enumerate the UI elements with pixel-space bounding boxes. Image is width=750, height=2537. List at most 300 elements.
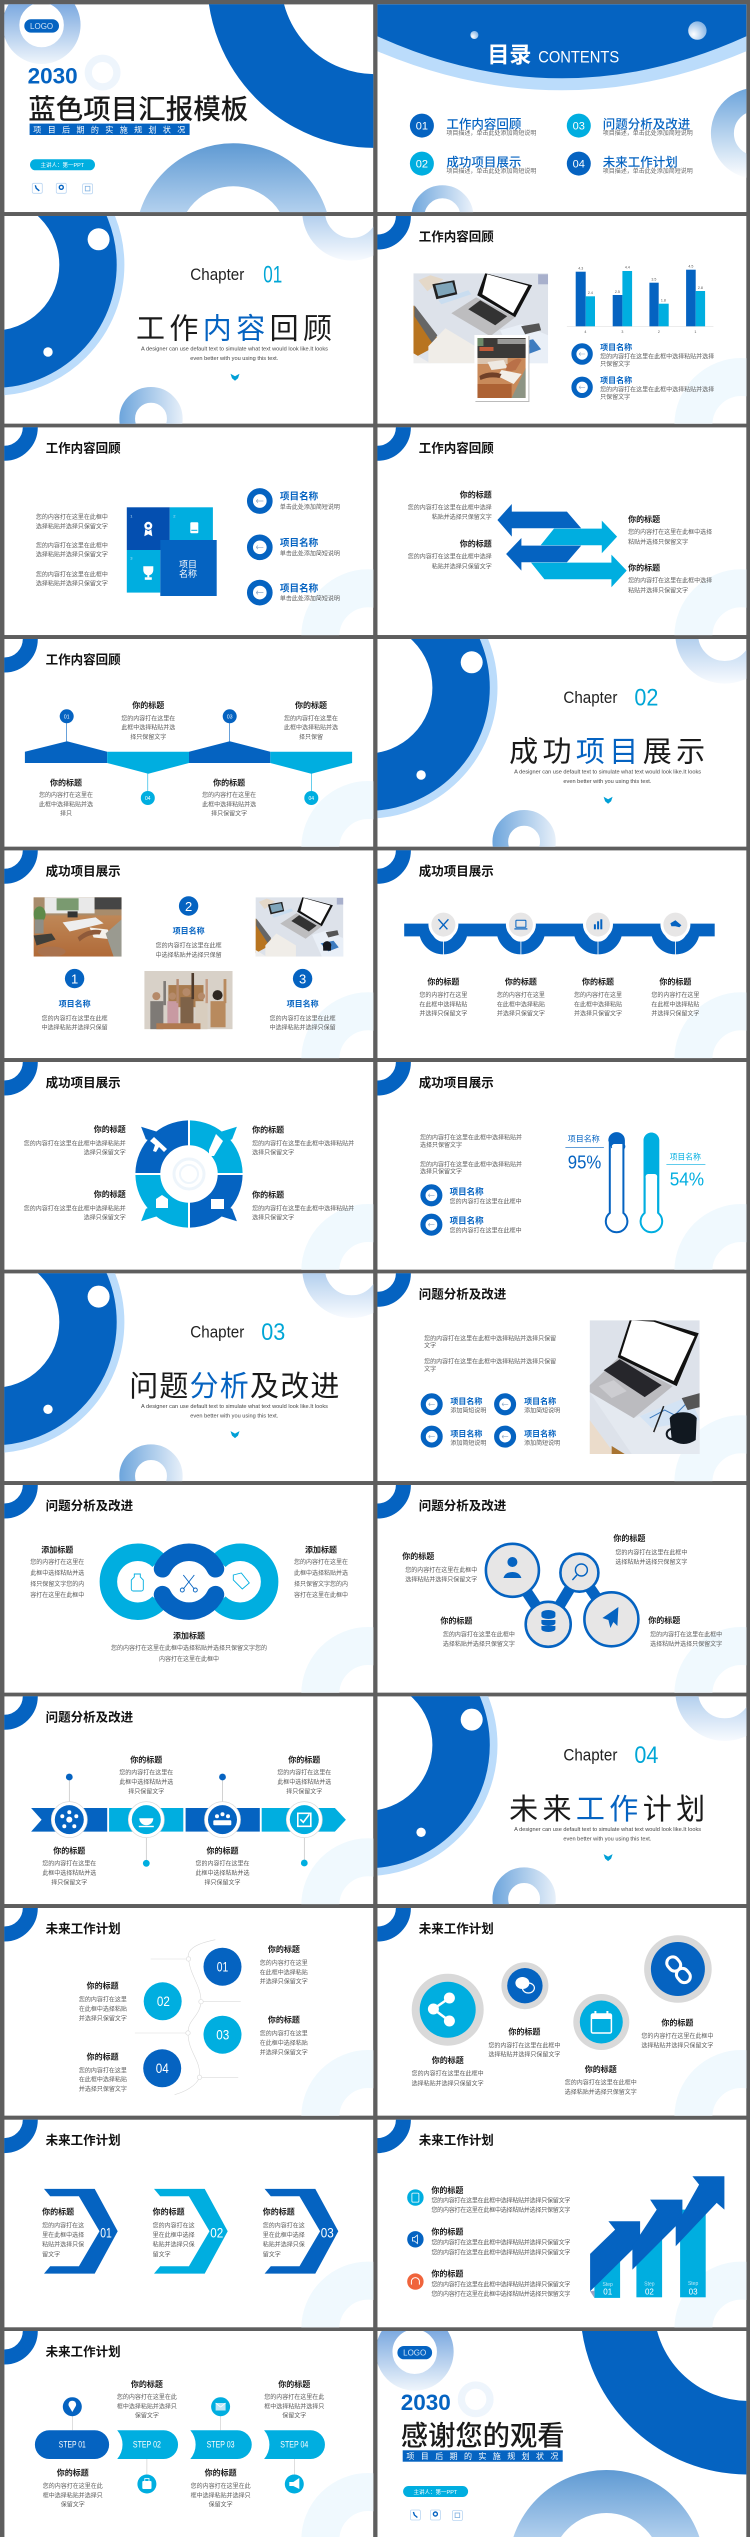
- chevron 03: [265, 2189, 338, 2274]
- numbered circles: [143, 1948, 242, 2087]
- heading: 成功项目展示: [46, 863, 121, 878]
- slide background: [4, 427, 374, 636]
- text: bottom left: 您的内容打在这里在此框中选择粘贴并: [24, 1204, 126, 1212]
- item: project one: [574, 342, 714, 368]
- text: bottom left: 此框中选择粘贴并选: [42, 1869, 96, 1877]
- step labels: Step: [644, 2282, 655, 2288]
- panel: future plan growth arrows: [351, 2094, 750, 2377]
- numbered circles: 02: [157, 1993, 170, 2009]
- slide background: [0, 1036, 416, 1319]
- chapter caption: [141, 1404, 328, 1419]
- text: top two: 框中选择粘贴并选择只: [264, 2402, 324, 2410]
- column 3 text: 在此框中选择粘贴: [574, 1000, 622, 1008]
- contents item 03: 03: [573, 121, 585, 133]
- text: 01: 你的标题: [42, 2207, 74, 2217]
- column 3 text: 您的内容打在这里: [574, 991, 622, 999]
- item: three: 你的标题: [431, 2269, 463, 2279]
- paragraphs: 您的内容打在这里在此框中选择粘贴并: [420, 1134, 522, 1142]
- column 3 text: [574, 976, 622, 1018]
- text: right: 添加标题: [305, 1545, 337, 1555]
- chapter caption: A designer can use default text to simulate what text would look like.It looks: [141, 1404, 328, 1410]
- item three: [423, 1428, 486, 1447]
- step 04: [264, 2430, 325, 2459]
- text: right two: 你的标题: [628, 563, 660, 573]
- text: top right: 选择粘贴并选择只保留文字: [615, 1558, 687, 1566]
- text: bottom left: 你的标题: [50, 777, 82, 787]
- chapter background shapes: [240, 561, 750, 866]
- icon: calendar circle: [573, 1994, 629, 2050]
- text: 04: 您的内容打在这里: [79, 2066, 127, 2074]
- text: bottom left: 您的内容打在这里在: [42, 1860, 96, 1868]
- text: bottom centre: 此框中选择粘贴并选: [195, 1869, 250, 1877]
- text: 02: 粘贴并选择只保: [153, 2241, 195, 2249]
- contents item 03: 问题分析及改进: [603, 116, 691, 131]
- panel: success projects thermometers: [351, 1036, 750, 1319]
- panel: success projects wheel: [0, 1036, 416, 1319]
- text: bottom two: [191, 2468, 251, 2509]
- icon: share circle: [412, 1974, 484, 2046]
- item 2: [156, 896, 222, 959]
- chapter caption: A designer can use default text to simulate what text would look like.It looks: [514, 770, 701, 776]
- text: bottom two: 你的标题: [205, 2468, 237, 2478]
- thermometer 95: 95%: [568, 1153, 601, 1173]
- text: top one: 保留文字: [135, 2412, 159, 2420]
- chapter title: 成功项目展示: [509, 736, 710, 768]
- presenter pill: 主讲人：第一PPT: [40, 161, 85, 169]
- chapter label: [563, 1742, 658, 1769]
- contents item 02: 成功项目展示: [446, 154, 521, 169]
- chapter label: 04: [634, 1742, 658, 1769]
- item: project two: 项目名称: [450, 1216, 484, 1226]
- numbered circles: 04: [156, 2060, 169, 2076]
- column 1 text: 你的标题: [427, 976, 459, 986]
- pins: [60, 709, 318, 805]
- item: one: 你的标题: [431, 2185, 463, 2195]
- connected bubbles: [486, 1544, 638, 1647]
- text: bottom left: [440, 1615, 515, 1648]
- text: 03: [260, 2015, 308, 2056]
- text: left two: 粘贴并选择只保留文字: [432, 562, 492, 570]
- panel: success projects wave: [351, 824, 750, 1107]
- step labels: Step: [603, 2282, 613, 2288]
- heading: 问题分析及改进: [419, 1286, 507, 1301]
- item: project two: 您的内容打在这里在此框中: [450, 1227, 522, 1235]
- text: top right: 你的标题: [252, 1125, 284, 1135]
- chevron 02: 02: [210, 2225, 223, 2241]
- item: project three: 单击此处添加简短说明: [280, 595, 340, 603]
- bar chart: 4.4: [625, 266, 630, 270]
- text: bottom right: 您的内容打在这里在此框中选择粘贴并: [252, 1204, 354, 1212]
- item 1: 中选择粘贴并选择只保留: [42, 1024, 108, 1032]
- text: bottom one: 保留文字: [61, 2501, 85, 2509]
- heading: 成功项目展示: [419, 1075, 494, 1090]
- photo: laptop: [256, 897, 343, 957]
- heading: 工作内容回顾: [419, 229, 494, 244]
- panel: problem analysis ribbon: [0, 1670, 416, 1953]
- column 1 text: 并选择只保留文字: [419, 1010, 467, 1018]
- bar chart: 4.3: [578, 266, 583, 270]
- text: bottom centre: 你的标题: [206, 1845, 238, 1855]
- text: top left: 您的内容打在这里在此框中: [405, 1566, 477, 1574]
- text: top right: 你的标题: [295, 700, 327, 710]
- chapter label: [563, 685, 658, 712]
- text: 01: 您的内容打在这: [42, 2221, 84, 2229]
- chapter title: 未来工作计划: [509, 1793, 710, 1826]
- slide background: [351, 1036, 750, 1319]
- icon: chevron: [230, 1431, 240, 1438]
- icon: chevron: [604, 797, 613, 804]
- text: share: 你的标题: [432, 2055, 464, 2065]
- text: 03: 你的标题: [268, 2015, 300, 2025]
- text: bottom right: 你的标题: [252, 1190, 284, 1200]
- text: 01: 在此框中选择粘贴: [260, 1968, 308, 1976]
- text: top left: [402, 1551, 477, 1583]
- text: top right: 择只保留: [299, 733, 323, 741]
- text: left: 您的内容打在这里在: [30, 1558, 84, 1566]
- text: top right: 你的标题: [613, 1533, 645, 1543]
- contents item 02: 02: [416, 159, 428, 171]
- text: 03: 您的内容打在这里: [260, 2030, 308, 2038]
- icon: chevron: [230, 374, 240, 381]
- text: 03: 留文字: [263, 2250, 281, 2258]
- item: one: 您的内容打在这里在此框中选择粘贴并选择只保留文字: [431, 2206, 570, 2214]
- contents item 04: 项目描述，单击此处添加简短说明: [603, 167, 693, 175]
- zigzag band: [25, 741, 352, 774]
- text: top two: 您的内容打在这里在此: [264, 2393, 324, 2401]
- step 01: STEP 01: [59, 2440, 86, 2450]
- text: right one: 粘贴并选择只保留文字: [628, 538, 688, 546]
- paragraphs: 您的内容打在这里在此框中选择粘贴并选择只保留: [424, 1358, 556, 1366]
- text: bottom two: 您的内容打在这里在此: [191, 2482, 251, 2490]
- text: bottom: [111, 1630, 267, 1663]
- heading: 问题分析及改进: [46, 1498, 134, 1513]
- text: bottom centre: 择只保留文字: [211, 810, 247, 818]
- text: bottom left: [39, 777, 93, 818]
- text: 01: 您的内容打在这里: [260, 1959, 308, 1967]
- subtitle bar: 项目后期的实施规划状况: [406, 2451, 558, 2461]
- text: calendar: 您的内容打在这里在此框中: [565, 2079, 637, 2087]
- item: two: [407, 2227, 570, 2256]
- text: top right: 你的标题: [288, 1755, 320, 1765]
- text: left two: 你的标题: [460, 538, 492, 548]
- slide background: [0, 2094, 416, 2377]
- heading: 未来工作计划: [46, 2344, 121, 2359]
- thermometer 95: 项目名称: [568, 1133, 600, 1143]
- column 4 text: 你的标题: [659, 976, 691, 986]
- text: top right: [277, 1755, 331, 1795]
- text: right two: 粘贴并选择只保留文字: [628, 586, 688, 594]
- inset photo: [474, 335, 529, 402]
- item 1: 项目名称: [59, 999, 91, 1009]
- text: bottom left: 你的标题: [440, 1615, 472, 1625]
- chapter label: [190, 1319, 285, 1346]
- text: top right: 选择只保留文字: [252, 1149, 294, 1157]
- text: bottom left: 择只: [60, 810, 72, 818]
- paragraphs: 文字: [424, 1342, 436, 1350]
- column 3 text: 你的标题: [582, 976, 614, 986]
- text: left one: 你的标题: [460, 489, 492, 499]
- text: link: 你的标题: [661, 2017, 693, 2027]
- chapter caption: [141, 347, 328, 362]
- icon: megaphone: [285, 2474, 304, 2494]
- item: two: 您的内容打在这里在此框中选择粘贴并选择只保留文字: [431, 2239, 570, 2247]
- presenter pill: [30, 159, 95, 170]
- slide background: [0, 1670, 416, 1953]
- text: top right: 您的内容打在这里在此框中选择粘贴并: [252, 1139, 354, 1147]
- contents top banner: [377, 4, 746, 90]
- text: 03: [263, 2207, 305, 2258]
- photo: laptop close-up: [590, 1320, 700, 1454]
- text: top two: 保留文字: [282, 2412, 306, 2420]
- text: calendar: 选择粘贴并选择只保留文字: [565, 2088, 637, 2096]
- contents heading: [490, 44, 618, 65]
- text: bottom: 添加标题: [173, 1630, 205, 1640]
- presenter pill: [403, 2486, 468, 2497]
- text: 03: 里在此框中选择: [263, 2231, 305, 2239]
- pins: 03: [227, 714, 233, 720]
- contents item 02: [410, 152, 536, 176]
- text: right: 您的内容打在这里在: [294, 1558, 348, 1566]
- paragraphs: 您的内容打在这里在此框中选择粘贴并: [420, 1160, 522, 1168]
- chapter title: 工作内容回顾: [136, 312, 336, 346]
- logo badge: LOGO: [30, 22, 53, 31]
- column 4 text: 您的内容打在这里: [651, 991, 699, 999]
- text: 04: 并选择只保留文字: [79, 2085, 127, 2093]
- step 02: [117, 2430, 178, 2459]
- wave band: [404, 930, 715, 948]
- item three: 添加简短说明: [450, 1439, 486, 1447]
- text: top centre: 择只保留文字: [130, 733, 166, 741]
- text: top left: 选择粘贴并选择只保留文字: [405, 1575, 477, 1583]
- text: top right: 您的内容打在这里在: [284, 714, 338, 722]
- item: project two: 单击此处添加简短说明: [280, 550, 340, 558]
- text: 01: 粘贴并选择只保: [42, 2241, 84, 2249]
- slide background: [0, 824, 416, 1107]
- year: 2030: [401, 2390, 451, 2415]
- text: bottom left: 择只保留文字: [51, 1878, 87, 1886]
- text: bottom right: [648, 1615, 722, 1648]
- item: three: 您的内容打在这里在此框中选择粘贴并选择只保留文字: [431, 2290, 570, 2298]
- tile grid: 名称: [179, 568, 197, 579]
- heading: 工作内容回顾: [46, 440, 121, 455]
- text: top one: [117, 2379, 177, 2420]
- text: right: 容打在这里在此框中: [294, 1591, 348, 1599]
- text: bottom left: [42, 1845, 96, 1886]
- chapter label: Chapter: [563, 1745, 618, 1764]
- item: project one: 项目名称: [450, 1187, 484, 1197]
- bar chart: 2.5: [615, 290, 620, 294]
- contents item 04: 未来工作计划: [603, 154, 678, 169]
- text: bottom left: 你的标题: [94, 1189, 126, 1199]
- text: bottom left: [24, 1189, 126, 1222]
- text: top right: 此框中选择粘贴并选: [284, 724, 338, 732]
- text: right: 择只保留文字您的内: [294, 1580, 348, 1588]
- text: top centre: 此框中选择粘贴并选: [121, 724, 175, 732]
- text: 02: 您的内容打在这里: [79, 1996, 127, 2004]
- connectors: [72, 2416, 294, 2475]
- text: top left: 您的内容打在这里在此框中选择粘贴并: [24, 1139, 126, 1147]
- panel: chapter 01: [4, 216, 374, 424]
- pins: 04: [145, 796, 151, 802]
- slide background: [0, 1882, 416, 2165]
- tile grid: 1: [130, 513, 133, 518]
- text: right: [294, 1545, 348, 1599]
- text: chat: 选择粘贴并选择只保留文字: [488, 2051, 560, 2059]
- panel: future plan icon circles: [351, 1882, 750, 2165]
- text: left one: 粘贴并选择只保留文字: [432, 513, 492, 521]
- item: project two: [250, 537, 340, 558]
- text: 01: 留文字: [42, 2250, 60, 2258]
- text: bottom left: 您的内容打在这里在: [39, 791, 93, 799]
- chapter background shapes: [240, 1618, 750, 1923]
- item: project one: 项目名称: [280, 490, 319, 502]
- text: bottom left: 此框中选择粘贴并选: [39, 800, 93, 808]
- icon: bag: [137, 2474, 156, 2494]
- text: bottom centre: 您的内容打在这里在: [195, 1860, 250, 1868]
- chapter caption: [514, 1827, 701, 1842]
- panel: work review timeline: [0, 613, 416, 896]
- bar chart: 4.5: [688, 264, 693, 268]
- text: 02: 里在此框中选择: [153, 2231, 195, 2239]
- tile grid: 3: [130, 555, 133, 560]
- item 2: 项目名称: [173, 925, 205, 935]
- text: top right: [252, 1125, 354, 1157]
- connector line: [135, 1940, 241, 2095]
- item: project two: 只保留文字: [600, 393, 630, 401]
- text: bottom two: 保留文字: [209, 2501, 233, 2509]
- step 03: STEP 03: [207, 2440, 235, 2450]
- contents heading: 目录: [487, 42, 531, 67]
- bar chart: 2.8: [698, 286, 703, 290]
- text: left: 此框中选择粘贴并选: [30, 1569, 84, 1577]
- text: top right: 择只保留文字: [286, 1787, 322, 1795]
- numbered circles: 03: [216, 2026, 229, 2042]
- logo badge: [397, 2346, 432, 2359]
- panel: future plan steps: [0, 2305, 416, 2537]
- item four: 添加简短说明: [524, 1439, 560, 1447]
- text: bottom one: [43, 2468, 103, 2509]
- panel: chapter 03: [0, 1195, 390, 1500]
- item: project two: 您的内容打在这里在此框中选择粘贴并选择: [600, 386, 714, 394]
- item: project three: 项目名称: [280, 582, 319, 594]
- icon: chat circle: [501, 1962, 548, 2009]
- chapter caption: even better with you using this text.: [190, 1413, 279, 1419]
- chapter label: Chapter: [563, 688, 618, 707]
- contents item 04: 04: [573, 159, 585, 171]
- panel: work review arrows: [377, 427, 746, 636]
- text: top two: 你的标题: [278, 2379, 310, 2389]
- text: bottom right: 您的内容打在这里在此框中: [650, 1631, 722, 1639]
- slide background: [351, 1882, 750, 2165]
- text: 01: [260, 1944, 308, 1986]
- text: bottom one: 您的内容打在这里在此: [43, 2482, 103, 2490]
- logo badge: LOGO: [403, 2348, 426, 2358]
- paragraphs: [424, 1334, 556, 1373]
- step labels: 02: [645, 2288, 654, 2297]
- text: right two: 您的内容打在这里在此框中选择: [628, 577, 712, 585]
- text: top right: [284, 700, 338, 741]
- text: 04: 在此框中选择粘贴: [79, 2076, 127, 2084]
- chapter background shapes: [0, 1195, 390, 1500]
- item: project one: [423, 1187, 522, 1205]
- heading: 成功项目展示: [419, 863, 494, 878]
- contents item 01: 工作内容回顾: [446, 116, 522, 131]
- text: link: 您的内容打在这里在此框中: [641, 2032, 713, 2040]
- text: bottom left: 你的标题: [53, 1845, 85, 1855]
- text: left two: [408, 538, 492, 570]
- tile grid: [127, 507, 217, 596]
- column 4 text: 并选择只保留文字: [651, 1010, 699, 1018]
- contents heading: CONTENTS: [538, 47, 619, 66]
- subtitle bar: 项目后期的实施规划状况: [33, 124, 185, 134]
- item: project one: 只保留文字: [600, 360, 630, 368]
- text: 01: [42, 2207, 84, 2258]
- heading: 成功项目展示: [46, 1075, 121, 1090]
- text: bottom centre: 此框中选择粘贴并选: [202, 800, 256, 808]
- text: chat: [488, 2026, 560, 2059]
- contents item 04: [567, 152, 693, 176]
- chapter caption: A designer can use default text to simulate what text would look like.It looks: [514, 1827, 701, 1833]
- left text block: 您的内容打在这里在此框中: [36, 513, 108, 521]
- contact icons: [410, 2510, 462, 2520]
- text: top left: 选择只保留文字: [84, 1149, 126, 1157]
- chapter caption: A designer can use default text to simulate what text would look like.It looks: [141, 347, 328, 353]
- text: left: 容打在这里在此框中: [30, 1591, 84, 1599]
- contents item 02: 项目描述，单击此处添加简短说明: [446, 167, 536, 175]
- heading: 未来工作计划: [46, 2133, 121, 2148]
- item: three: 您的内容打在这里在此框中选择粘贴并选择只保留文字: [431, 2280, 570, 2288]
- text: top centre: [119, 1755, 173, 1795]
- panel: contents slide: [377, 4, 746, 212]
- pins and nodes: [51, 1774, 322, 1867]
- chapter title: 问题分析及改进: [129, 1370, 341, 1403]
- pins: 01: [64, 714, 70, 720]
- panel: problem analysis photo: [351, 1247, 750, 1530]
- text: right: 此框中选择粘贴并选: [294, 1569, 348, 1577]
- text: bottom right: [252, 1190, 354, 1222]
- text: top centre: 你的标题: [132, 700, 164, 710]
- step bars: [590, 2210, 706, 2298]
- column 2 text: 您的内容打在这里: [497, 991, 545, 999]
- text: bottom centre: [202, 777, 256, 818]
- photo: desk writing: [34, 897, 122, 957]
- item: project two: [423, 1216, 522, 1235]
- panel: problem analysis bubbles: [351, 1459, 750, 1742]
- heading: 问题分析及改进: [419, 1498, 507, 1513]
- paragraphs: [420, 1134, 522, 1176]
- text: right two: [628, 563, 712, 594]
- closing title: 感谢您的观看: [401, 2420, 565, 2451]
- text: left: 添加标题: [41, 1545, 73, 1555]
- item: project three: [250, 582, 340, 603]
- contents item 01: 01: [416, 121, 428, 133]
- slide background: [351, 1459, 750, 1742]
- heading: 问题分析及改进: [46, 1709, 134, 1724]
- text: calendar: [565, 2064, 637, 2096]
- text: 02: 你的标题: [153, 2207, 185, 2217]
- chevron 01: [44, 2189, 118, 2274]
- text: left: 择只保留文字您的内: [30, 1580, 84, 1588]
- text: share: 您的内容打在这里在此框中: [412, 2070, 484, 2078]
- text: top centre: 择只保留文字: [128, 1787, 164, 1795]
- text: 02: 您的内容打在这: [153, 2221, 195, 2229]
- panel: future plan chevrons: [0, 2094, 416, 2377]
- column 1 text: 您的内容打在这里: [419, 991, 467, 999]
- chevron 03: 03: [321, 2225, 334, 2241]
- icon: chevron: [604, 1854, 613, 1861]
- text: top one: 框中选择粘贴并选择只: [117, 2402, 177, 2410]
- heading: 工作内容回顾: [46, 652, 121, 667]
